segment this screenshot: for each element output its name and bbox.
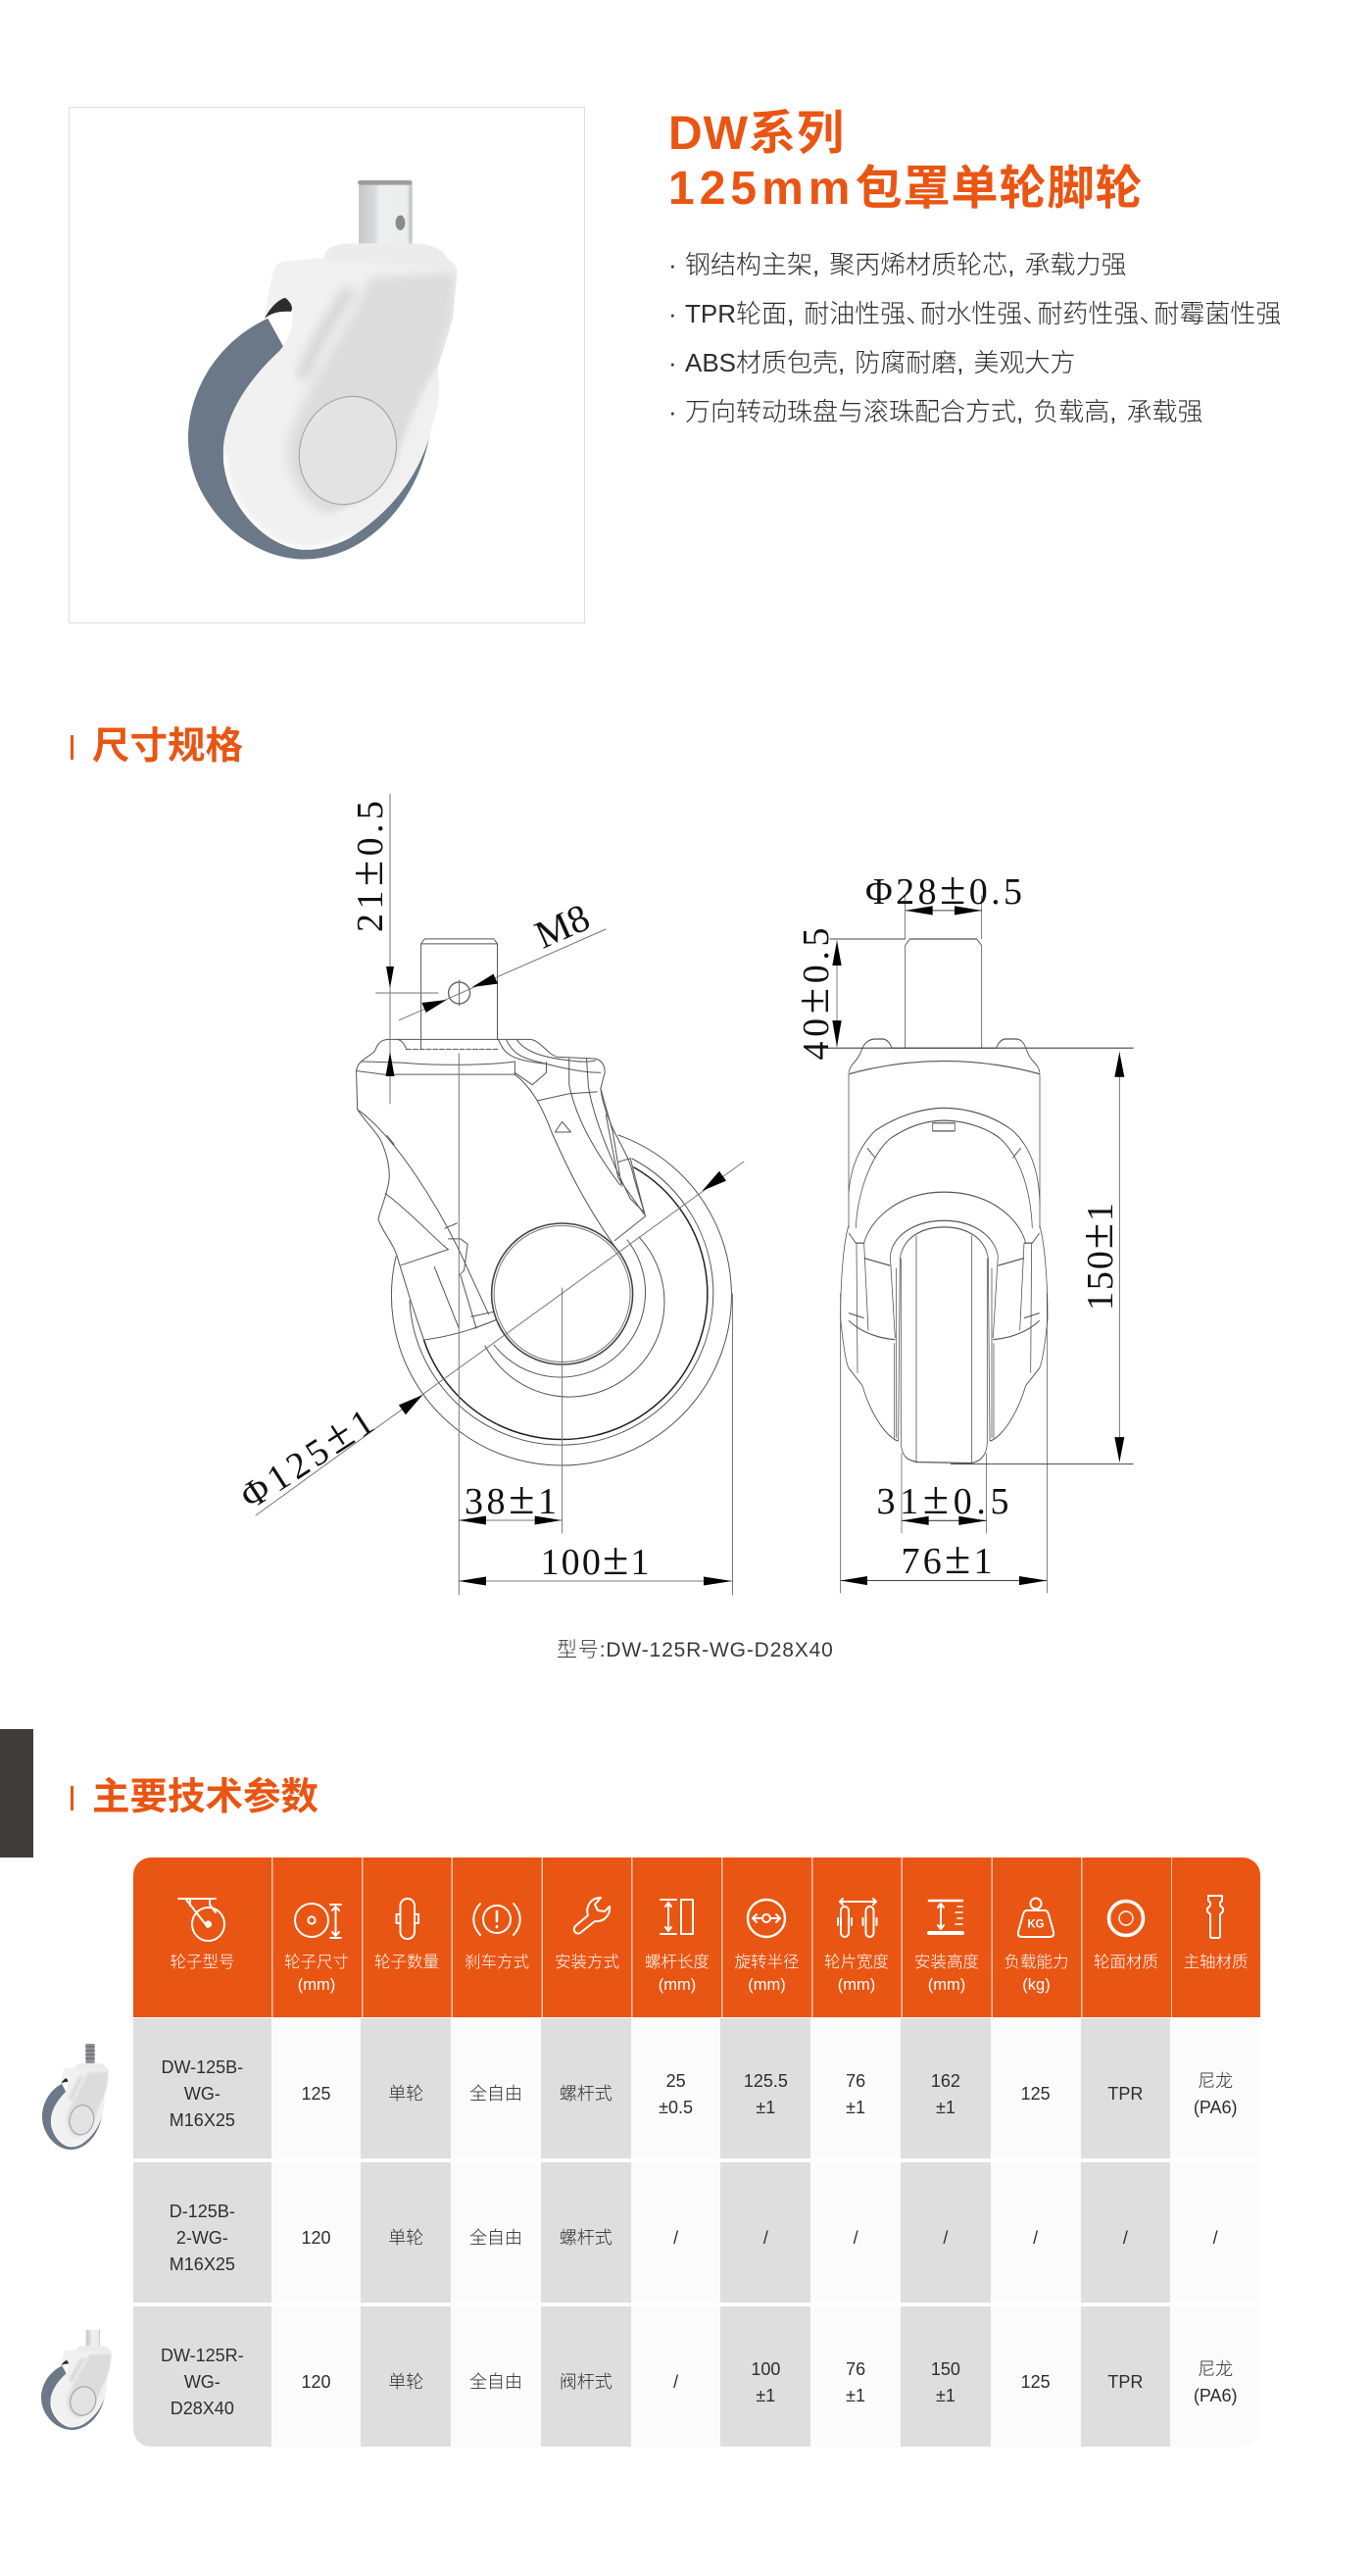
feature list: 万向转动珠盘与滚珠配合方式, 负载高, 承载强 [685,397,1203,426]
header label: shaft material: 主轴材质 [1184,1954,1249,1971]
header label: wheel size: (mm) [298,1976,335,1994]
table row: DW-125B-WG-M16X25: DW-125B- [161,2057,243,2077]
table row: DW-125B-WG-M16X25: 125.5 [744,2071,788,2091]
dimension labels: 100±1 [541,1533,649,1585]
table row: D-125B-2-WG-M16X25: 单轮 [388,2228,423,2248]
table row: DW-125B-WG-M16X25: 125 [1021,2084,1051,2104]
table row: DW-125B-WG-M16X25: 螺杆式 [560,2084,612,2104]
dimension labels [228,801,649,1585]
header label: wheel size: 轮子尺寸 [284,1954,349,1971]
icon: shaft material [1207,1896,1223,1938]
caster body outline [357,939,646,1340]
title: 125mm包罩单轮脚轮 [668,163,1143,215]
table row: DW-125B-WG-M16X25: ±1 [756,2098,775,2117]
table row: DW-125R-WG-D28X40: (PA6) [1194,2386,1238,2405]
header label: mounting height: (mm) [928,1976,965,1994]
table row: D-125B-2-WG-M16X25: M16X25 [170,2254,235,2274]
table row: DW-125R-WG-D28X40: 120 [302,2372,331,2392]
table row: DW-125R-WG-D28X40: ±1 [756,2386,775,2405]
header label: wheel width [824,1953,889,1994]
header label: wheel count: 轮子数量 [374,1954,439,1971]
table row: D-125B-2-WG-M16X25: / [1213,2228,1218,2248]
table row: D-125B-2-WG-M16X25: 螺杆式 [560,2228,612,2248]
table row: DW-125R-WG-D28X40 [133,2306,1260,2447]
dimension labels: 21±0.5 [341,801,393,932]
header label: load capacity: (kg) [1022,1976,1051,1994]
dark side block [0,1729,33,1858]
icon: bolt length [661,1900,693,1934]
title: DW系列 [668,108,845,160]
thumbnail: caster with round stem [41,2329,112,2430]
table row: DW-125B-WG-M16X25: ±1 [936,2098,956,2117]
table row: DW-125R-WG-D28X40: / [673,2372,678,2392]
table row: D-125B-2-WG-M16X25: 全自由 [469,2228,522,2248]
header label: wheel width: (mm) [838,1976,875,1994]
table row: DW-125B-WG-M16X25: ±1 [846,2098,865,2117]
table row: DW-125B-WG-M16X25: 76 [846,2071,865,2091]
header label: mounting height: 安装高度 [914,1954,979,1971]
table row: DW-125B-WG-M16X25: M16X25 [170,2110,235,2130]
feature list: 钢结构主架, 聚丙烯材质轮芯, 承载力强 [685,250,1127,279]
header label: mounting type: 安装方式 [555,1954,619,1971]
header column dividers [271,1858,1172,2017]
feature list [668,250,1281,426]
table row: DW-125R-WG-D28X40: 阀杆式 [560,2372,612,2392]
table row: DW-125B-WG-M16X25 [133,2018,1260,2158]
header label: wheel size [284,1954,349,1994]
heading: main technical parameters: 主要技术参数 [92,1776,318,1818]
table row: DW-125R-WG-D28X40: 76 [846,2359,865,2379]
panel: product image frame [69,107,585,623]
front dimension labels: 76±1 [902,1532,992,1584]
icon: load weight: KG [1027,1919,1045,1931]
table row: DW-125R-WG-D28X40: 全自由 [469,2372,522,2392]
table row: DW-125B-WG-M16X25: ±0.5 [659,2098,693,2117]
table row: D-125B-2-WG-M16X25: / [1033,2228,1038,2248]
table row: DW-125R-WG-D28X40: 单轮 [388,2372,423,2392]
feature list: · [668,299,677,328]
product image: white caster with grey tyre [188,180,457,559]
front dimension arrows [832,906,1124,1585]
header label: bolt length [645,1954,710,1994]
table row: DW-125R-WG-D28X40: 125 [1021,2372,1051,2392]
table row: DW-125R-WG-D28X40: DW-125R- [161,2346,244,2365]
header label: swivel radius [735,1954,800,1994]
icon: load weight [1018,1898,1054,1937]
right side cover [988,1225,1048,1441]
header label: tread material: 轮面材质 [1094,1954,1158,1971]
table row: DW-125B-WG-M16X25: 25 [666,2071,686,2091]
front dimension lines [826,896,1134,1593]
table row: D-125B-2-WG-M16X25: / [1123,2228,1128,2248]
table row: DW-125B-WG-M16X25: TPR [1107,2084,1143,2104]
feature list: · [668,250,677,279]
front dimension labels: 40±0.5 [787,927,839,1061]
table row: D-125B-2-WG-M16X25: / [943,2228,948,2248]
table row: DW-125R-WG-D28X40: TPR [1107,2372,1143,2392]
wheel outline arcs [391,1135,731,1465]
icon: wheel size [295,1904,341,1938]
dimension labels: Φ125±1 [228,1394,382,1519]
icon: swivel radius [748,1900,785,1937]
table row: DW-125B-WG-M16X25: 单轮 [388,2084,423,2104]
icon: mounting height [929,1901,962,1933]
header label: swivel radius: (mm) [748,1976,786,1994]
header label: mounting height [914,1954,979,1994]
front dimension labels: Φ28±0.5 [865,863,1022,915]
dimension and centre lines [256,794,744,1595]
icon: wheel count [396,1899,418,1939]
table row: D-125B-2-WG-M16X25: 2-WG- [176,2228,228,2248]
title [668,108,1143,215]
table row: DW-125B-WG-M16X25: 162 [931,2071,960,2091]
left side cover [841,1225,900,1441]
stem hole [449,980,470,1006]
table row: DW-125B-WG-M16X25: 125 [302,2084,331,2104]
table row: D-125B-2-WG-M16X25: 120 [302,2228,331,2248]
feature list: · [668,397,677,426]
dimension labels: 38±1 [465,1472,557,1524]
header label: wheel width: 轮片宽度 [824,1954,889,1971]
icon: brake [473,1904,520,1935]
table row: DW-125B-WG-M16X25: 尼龙 [1198,2071,1233,2091]
table row: DW-125B-WG-M16X25: (PA6) [1194,2098,1238,2117]
table row: DW-125R-WG-D28X40: ±1 [936,2386,956,2405]
table row: DW-125B-WG-M16X25: 全自由 [469,2084,522,2104]
feature list: TPR轮面, 耐油性强、耐水性强、耐药性强、耐霉菌性强 [685,299,1281,328]
table header band [133,1858,1260,2017]
table row: DW-125R-WG-D28X40: 尼龙 [1198,2359,1233,2379]
icon: wheel width [838,1899,876,1937]
table row: DW-125B-WG-M16X25: WG- [184,2084,220,2104]
table row: DW-125R-WG-D28X40: WG- [184,2372,220,2392]
icon: tyre material [1109,1902,1143,1935]
header label: load capacity [1004,1954,1068,1994]
model caption: 型号:DW-125R-WG-D28X40 [557,1639,834,1661]
table row: DW-125R-WG-D28X40: ±1 [846,2386,865,2405]
table row: D-125B-2-WG-M16X25: / [854,2228,858,2248]
front dimension labels [787,863,1123,1584]
header label: load capacity: 负载能力 [1004,1954,1068,1971]
header label: swivel radius: 旋转半径 [735,1954,800,1971]
header label: brake type: 刹车方式 [465,1954,529,1971]
front dimension labels: 31±0.5 [876,1472,1009,1524]
table row: D-125B-2-WG-M16X25: / [673,2228,678,2248]
table row: D-125B-2-WG-M16X25: D-125B- [170,2202,235,2221]
dimension arrows [386,966,732,1586]
icon: caster [178,1899,224,1941]
heading: dimensions: 尺寸规格 [92,725,243,768]
feature list: · [668,348,677,377]
feature list: ABS材质包壳, 防腐耐磨, 美观大方 [685,348,1076,377]
icon: wrench [574,1898,610,1933]
table row: DW-125R-WG-D28X40: 150 [931,2359,960,2379]
table row: D-125B-2-WG-M16X25: / [763,2228,768,2248]
table row: D-125B-2-WG-M16X25 [133,2162,1260,2303]
front dimension labels: 150±1 [1071,1203,1123,1311]
table row: DW-125R-WG-D28X40: 100 [751,2359,780,2379]
front body outline [841,939,1048,1463]
header label: bolt length: (mm) [659,1976,696,1994]
table row: DW-125R-WG-D28X40: D28X40 [171,2399,234,2418]
dimension labels: M8 [528,895,596,958]
header label: bolt length: 螺杆长度 [645,1954,710,1971]
header label: wheel model: 轮子型号 [171,1954,235,1971]
thumbnail: caster with threaded stem [42,2044,109,2150]
